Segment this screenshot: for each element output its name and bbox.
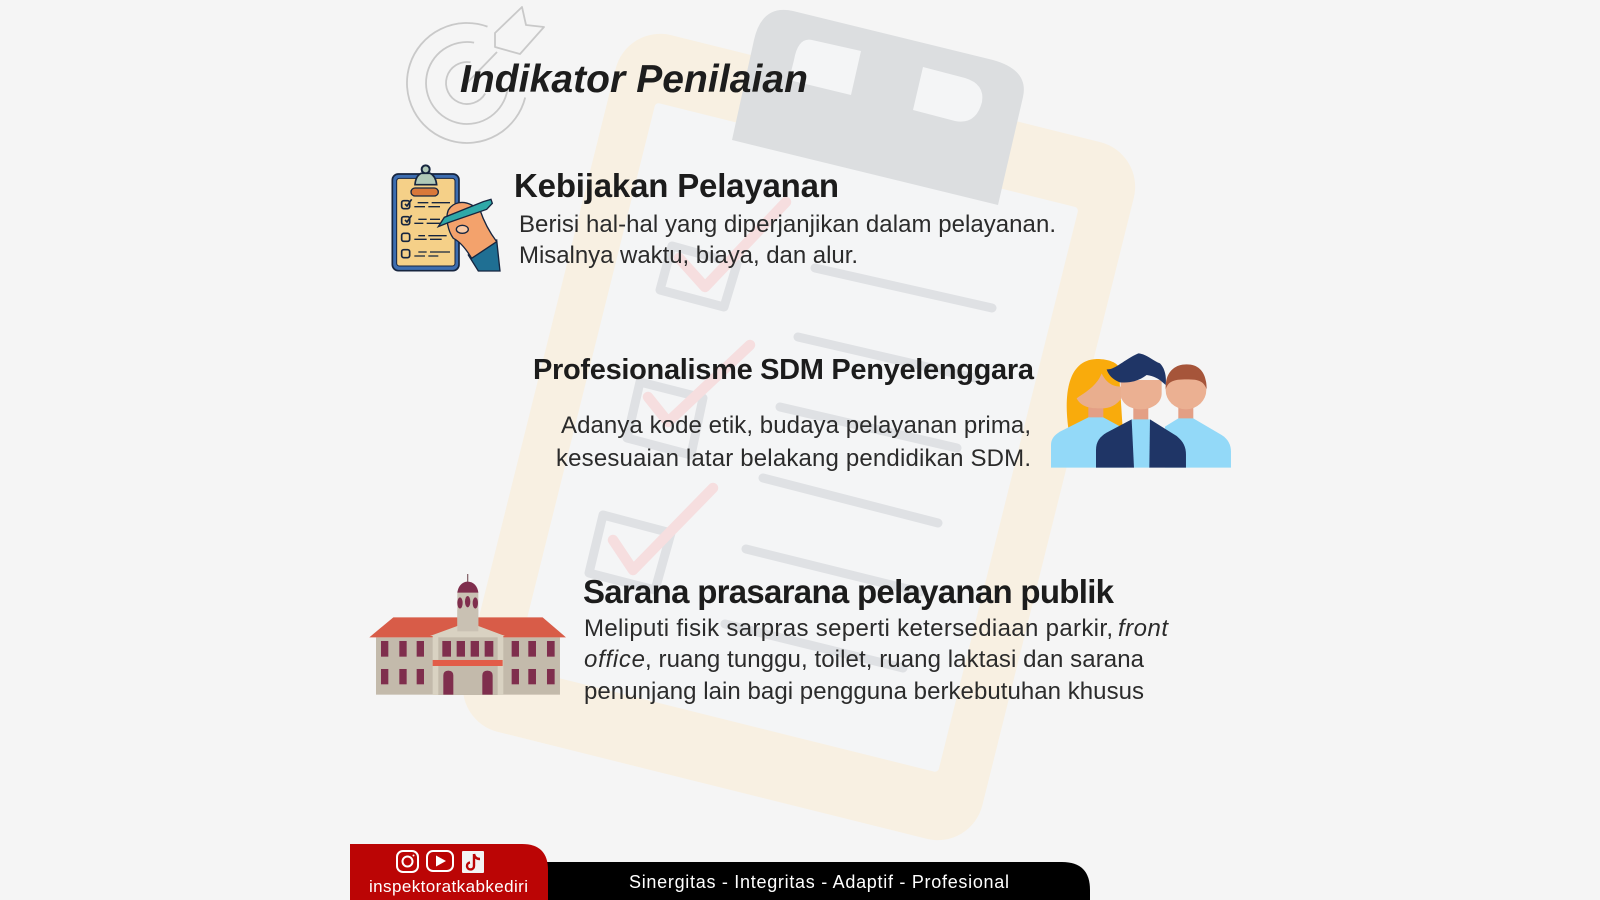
icon: instagram (397, 851, 418, 872)
section 1 heading: Kebijakan Pelayanan (514, 167, 839, 204)
section 2 text (556, 412, 1031, 472)
section 2 text: Adanya kode etik, budaya pelayanan prima, (561, 412, 1031, 439)
title: Indikator Penilaian (460, 58, 808, 101)
footer bar: motto: Sinergitas - Integritas - Adaptif - Profesional (629, 872, 1009, 892)
section 3 text: , ruang tunggu, toilet, ruang laktasi dan sarana (645, 646, 1145, 673)
icon: youtube (427, 851, 453, 871)
background clipboard illustration (453, 10, 1145, 850)
section 3 text (584, 615, 1169, 705)
section 3 text: front (1118, 615, 1169, 642)
footer bar: motto (530, 862, 1090, 900)
section 1 text (519, 211, 1056, 269)
section 3 heading: Sarana prasarana pelayanan publik (583, 573, 1115, 610)
section 2 heading: Profesionalisme SDM Penyelenggara (533, 354, 1035, 386)
section 1 text: Berisi hal-hal yang diperjanjikan dalam pelayanan. (519, 211, 1056, 238)
section 2 text: kesesuaian latar belakang pendidikan SDM. (556, 445, 1031, 472)
section 1 text: Misalnya waktu, biaya, dan alur. (519, 242, 858, 269)
icon: target with arrow (407, 7, 544, 143)
section 3 text: office (584, 646, 645, 673)
social handle: inspektoratkabkediri (369, 877, 528, 896)
icon: tiktok (462, 851, 484, 873)
section 3 text: Meliputi fisik sarpras seperti ketersediaan parkir, (584, 615, 1113, 642)
section 3 text: penunjang lain bagi pengguna berkebutuhan khusus (584, 678, 1144, 705)
icon: government building (369, 574, 566, 695)
icon: three people (1051, 353, 1231, 468)
footer: social media badge (350, 844, 548, 900)
icon: clipboard with hand writing (392, 165, 500, 271)
